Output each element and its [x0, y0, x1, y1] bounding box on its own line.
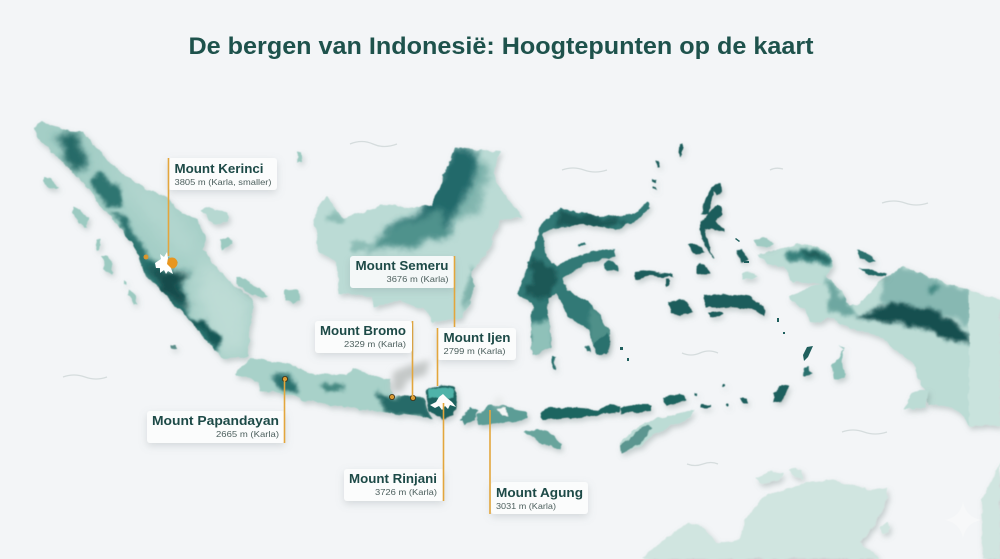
label: Mount Bromo: Mount Bromo — [320, 323, 406, 338]
label: Mount Kerinci: Mount Kerinci — [174, 161, 264, 176]
volcano markers — [282, 376, 416, 401]
map: Sulawesi — [518, 202, 651, 360]
label: Mount Papandayan — [147, 379, 285, 443]
title: De bergen van Indonesië: Hoogtepunten op de kaart — [188, 33, 814, 60]
label: Mount Kerinci: 3805 m (Karla, smaller) — [174, 177, 272, 187]
label: Mount Kerinci — [168, 158, 277, 256]
label: Mount Agung — [490, 410, 588, 514]
label: Mount Papandayan: Mount Papandayan — [152, 413, 279, 428]
label: Mount Agung: 3031 m (Karla) — [496, 501, 556, 511]
Moluccan sea islets — [620, 238, 813, 361]
label: Mount Rinjani: Mount Rinjani — [349, 471, 437, 486]
label: Mount Ijen — [437, 328, 516, 386]
volcano smoke — [392, 360, 503, 408]
sea waves — [63, 142, 928, 466]
map: Java — [235, 358, 435, 422]
map: Australia — [642, 463, 1000, 559]
label: Mount Bromo: 2329 m (Karla) — [344, 339, 406, 349]
Sulawesi islands — [553, 242, 673, 370]
label: Mount Rinjani — [344, 403, 444, 501]
map: Sumatra — [33, 122, 253, 358]
label: Mount Semeru — [350, 256, 455, 327]
Sumatra islands — [44, 152, 303, 350]
snow peak: Kerinci — [144, 252, 178, 274]
Papua islands — [742, 237, 928, 410]
map: Papua — [758, 243, 1000, 435]
label: Mount Papandayan: 2665 m (Karla) — [216, 429, 279, 439]
label: Mount Semeru: 3676 m (Karla) — [386, 274, 449, 284]
map: Kalimantan — [313, 148, 522, 323]
snow peak: Rinjani — [430, 394, 456, 410]
label: Mount Bromo — [315, 321, 412, 398]
label: Mount Rinjani: 3726 m (Karla) — [375, 487, 437, 497]
label: Mount Ijen: Mount Ijen — [444, 330, 510, 345]
map: Lesser Sunda islands — [425, 384, 790, 453]
sparkle watermark — [945, 502, 981, 538]
map: Maluku islands — [653, 144, 766, 317]
label: Mount Agung: Mount Agung — [496, 485, 583, 500]
label: Mount Semeru: Mount Semeru — [356, 258, 448, 273]
label: Mount Ijen: 2799 m (Karla) — [444, 346, 506, 356]
